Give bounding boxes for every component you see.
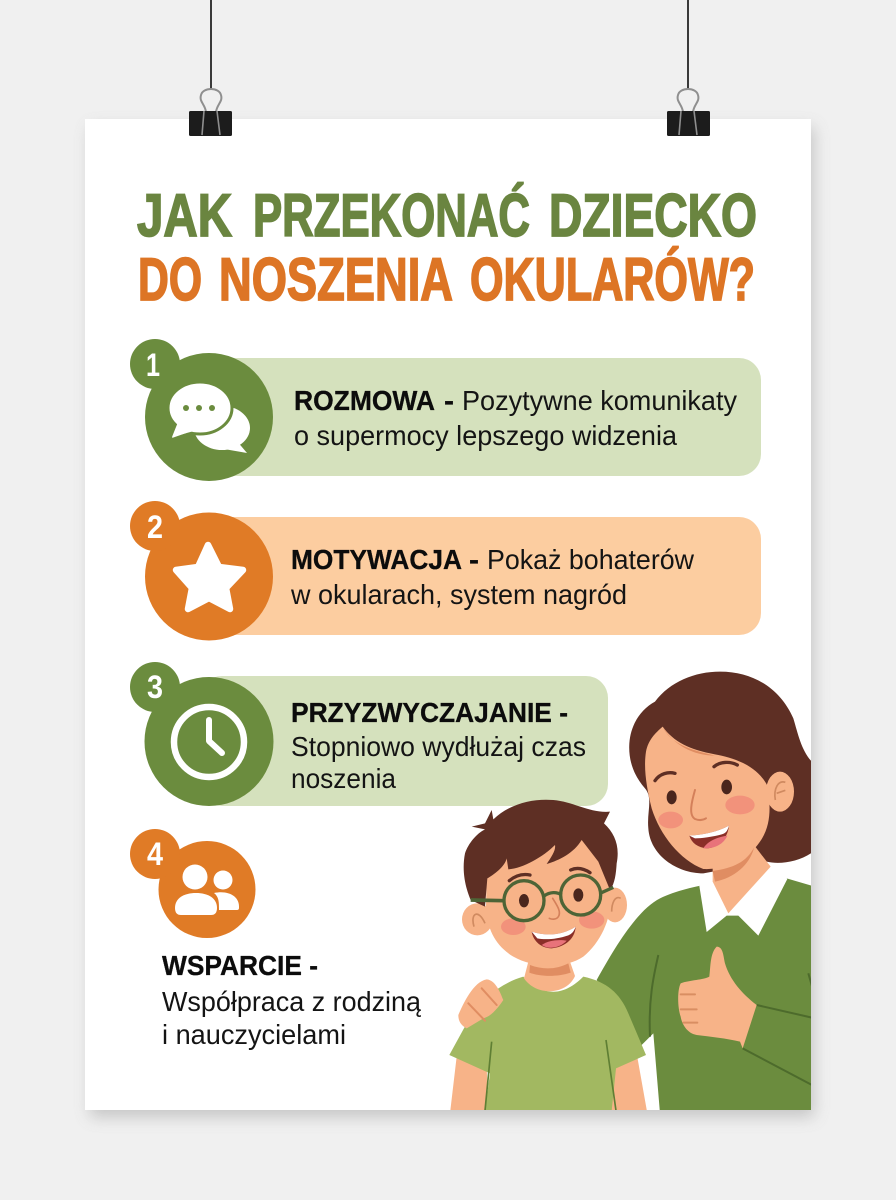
- step 3 text: Stopniowo wydłużaj czas: [291, 731, 586, 762]
- mother's sweater: [597, 878, 815, 1113]
- step 1 text: ROZMOWA: [294, 385, 435, 416]
- mother's hand on boy's shoulder: [458, 979, 503, 1028]
- step 2 text: -: [469, 544, 479, 575]
- mother's neck shadow: [713, 848, 754, 882]
- step 1 badge with chat icon: 1: [146, 347, 160, 383]
- step 2 panel: [200, 517, 761, 635]
- step 1: rozmowa: [130, 339, 761, 481]
- illustration: mother and boy with glasses: [449, 672, 815, 1113]
- mother's neck: [713, 845, 771, 913]
- step 4: wsparcie: [130, 829, 421, 1050]
- mother: [597, 672, 815, 1113]
- step 3 text: [291, 697, 586, 794]
- step 4 badge with people icon: [130, 829, 256, 938]
- title: NOSZENIA: [219, 246, 453, 313]
- step 2 badge with star icon: 2: [147, 509, 163, 545]
- hanging poster infographic: [83, 0, 821, 1124]
- mother's collar: [699, 878, 788, 936]
- step 2 text: MOTYWACJA: [291, 544, 462, 575]
- binder clip left: [189, 0, 232, 136]
- mother's face: [645, 727, 770, 869]
- step 4 text: WSPARCIE -: [162, 950, 318, 981]
- boy's facial features: [501, 869, 604, 948]
- boy's glasses: [471, 875, 613, 921]
- step 2 badge with star icon: [130, 501, 273, 640]
- title: [137, 182, 757, 313]
- step 4 text: Współpraca z rodziną: [162, 986, 421, 1017]
- mother's ear: [766, 772, 794, 812]
- boy's hair: [464, 800, 618, 907]
- step 2 text: [290, 544, 695, 610]
- boy's arms: [450, 1058, 647, 1110]
- boy: [449, 800, 647, 1113]
- step 3: przyzwyczajanie: [130, 662, 608, 806]
- step 1 text: -: [444, 385, 454, 416]
- title: OKULARÓW?: [470, 246, 755, 313]
- mother's thumbs-up hand: [678, 947, 757, 1048]
- binder clip right: [667, 0, 710, 136]
- step 1 text: [294, 385, 737, 451]
- boy's face: [486, 840, 609, 962]
- title: DZIECKO: [549, 182, 757, 249]
- poster sheet: [85, 119, 811, 1110]
- step 1 badge with chat icon: [130, 339, 273, 481]
- step 2 text: Pokaż bohaterów: [487, 544, 695, 575]
- title: DO: [138, 246, 202, 313]
- step 1 text: o supermocy lepszego widzenia: [294, 420, 677, 451]
- step 3 badge with clock icon: [130, 662, 274, 806]
- step 4 text: [162, 950, 421, 1050]
- step 3 text: PRZYZWYCZAJANIE -: [291, 697, 568, 728]
- step 4 badge with people icon: 4: [147, 836, 163, 872]
- boy's neck: [524, 962, 575, 991]
- step 3 panel: [200, 676, 608, 806]
- step 4 text: i nauczycielami: [162, 1019, 346, 1050]
- title: JAK: [137, 182, 232, 249]
- boy's neck shadow: [529, 963, 571, 976]
- step 1 panel: [200, 358, 761, 476]
- step 1 text: Pozytywne komunikaty: [462, 385, 737, 416]
- step 3 badge with clock icon: 3: [147, 669, 163, 705]
- step 3 text: noszenia: [291, 763, 396, 794]
- title: PRZEKONAĆ: [253, 182, 530, 249]
- mother's hair: [629, 672, 813, 873]
- step 2 text: w okularach, system nagród: [290, 579, 627, 610]
- boy's ears: [462, 888, 627, 935]
- mother's facial features: [655, 727, 755, 848]
- boy's t-shirt: [449, 977, 646, 1111]
- step 2: motywacja: [130, 501, 761, 640]
